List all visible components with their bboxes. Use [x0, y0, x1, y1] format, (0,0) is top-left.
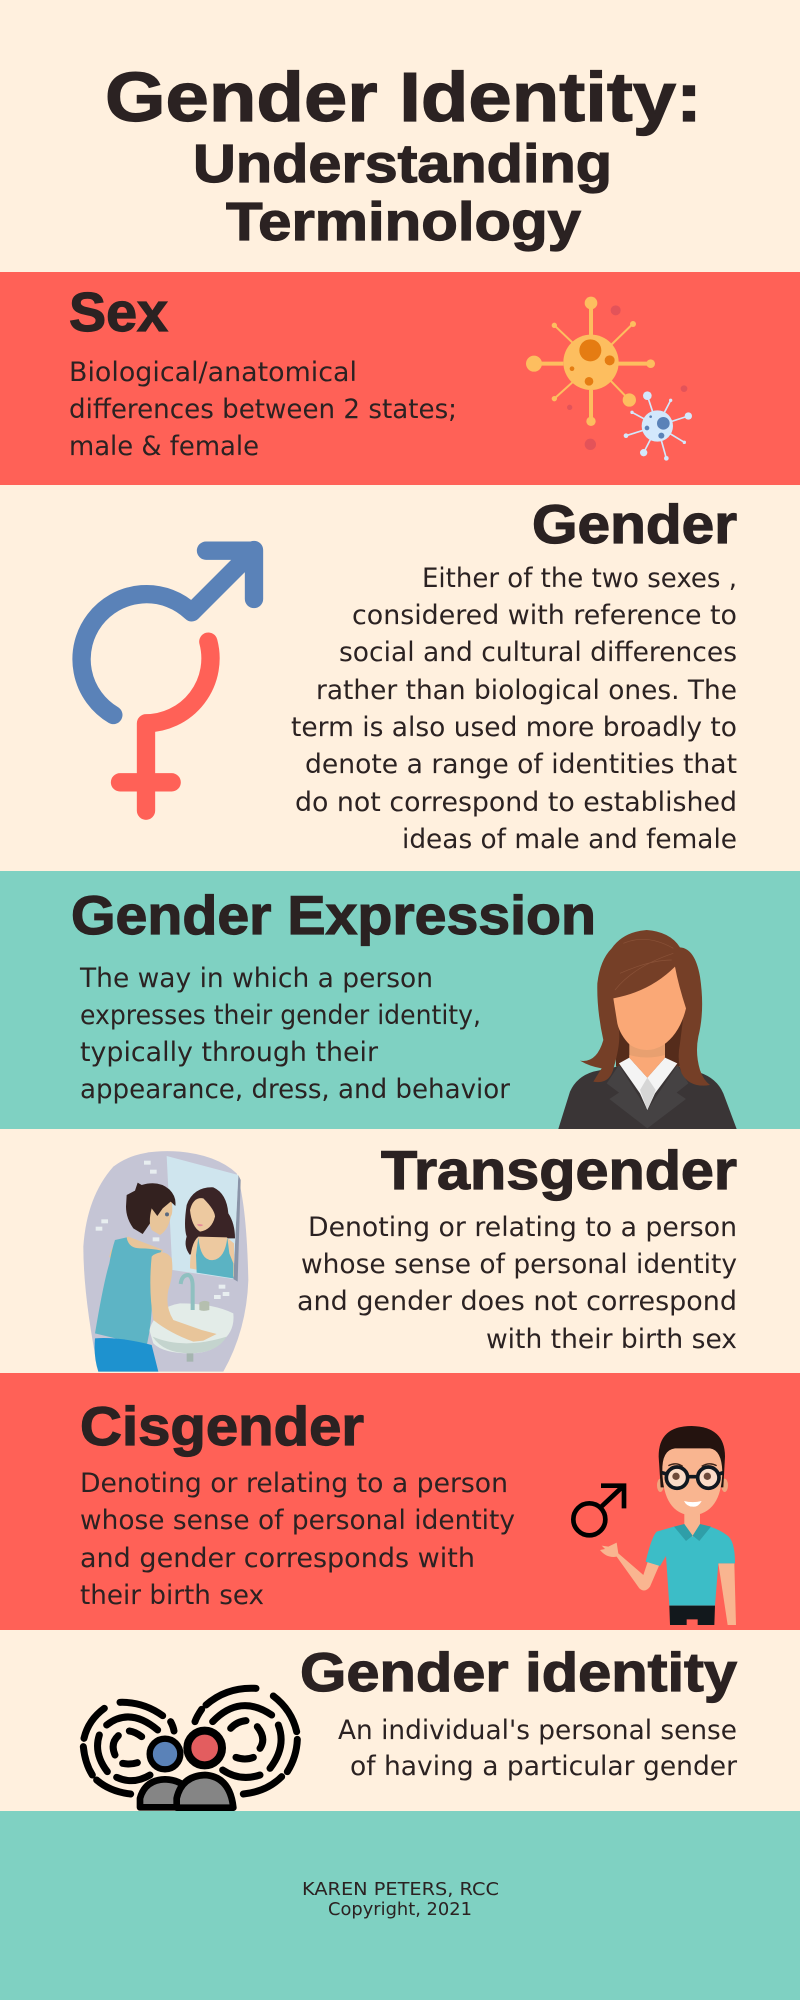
text: gender expression definition	[79, 963, 511, 1105]
panel: sex	[0, 272, 800, 485]
text: cisgender definition: whose sense of personal identity	[80, 1505, 515, 1536]
heading: transgender: Transgender	[381, 1139, 737, 1201]
heading: cisgender: Cisgender	[80, 1395, 364, 1457]
text: cisgender definition: their birth sex	[80, 1580, 264, 1611]
illustration: man with glasses	[600, 1426, 736, 1625]
title: Terminology	[226, 192, 581, 252]
text: gender definition: social and cultural differences	[339, 637, 737, 668]
text: gender expression definition: appearance, dress, and behavior	[80, 1074, 511, 1105]
text: author and copyright: Copyright, 2021	[328, 1899, 472, 1920]
text: gender expression definition: The way in which a person	[79, 963, 433, 994]
title	[105, 58, 702, 252]
text: sex definition	[69, 357, 457, 462]
panel: cisgender	[0, 1373, 800, 1630]
text: transgender definition: whose sense of personal identity	[301, 1249, 737, 1280]
text: gender expression definition: expresses their gender identity,	[80, 1000, 481, 1031]
text: gender definition: do not correspond to established	[295, 787, 737, 818]
text: transgender definition: Denoting or relating to a person	[308, 1212, 737, 1243]
band: gender expression background	[0, 871, 800, 1129]
band: footer background	[0, 1811, 800, 2000]
text: gender expression definition: typically through their	[80, 1037, 379, 1068]
heading: gender identity: Gender identity	[300, 1641, 737, 1703]
icon: male symbol	[573, 1486, 624, 1535]
text: gender definition: Either of the two sexes ,	[422, 563, 737, 594]
band: sex background	[0, 272, 800, 485]
text: author and copyright	[302, 1879, 499, 1920]
text: gender identity definition: of having a particular gender	[350, 1751, 738, 1782]
text: transgender definition	[297, 1212, 737, 1355]
text: gender definition: ideas of male and female	[402, 824, 737, 855]
panel: gender expression	[0, 871, 800, 1129]
text: transgender definition: and gender does not correspond	[297, 1286, 737, 1317]
icon: male and female symbols	[82, 550, 254, 811]
text: gender definition: rather than biological ones. The	[316, 675, 737, 706]
text: cisgender definition: and gender corresponds with	[80, 1543, 475, 1574]
text: author and copyright: KAREN PETERS, RCC	[302, 1879, 499, 1900]
heading: gender: Gender	[532, 493, 737, 555]
heading: gender expression: Gender Expression	[71, 884, 596, 946]
icon: cells	[526, 297, 692, 461]
text: cisgender definition	[80, 1468, 515, 1611]
panel: gender identity	[83, 1641, 738, 1808]
panel: transgender	[83, 1139, 737, 1372]
text: gender definition	[291, 563, 737, 855]
text: gender definition: denote a range of identities that	[305, 749, 737, 780]
band: cisgender background	[0, 1373, 800, 1630]
panel: footer	[0, 1811, 800, 2000]
text: cisgender definition: Denoting or relating to a person	[80, 1468, 508, 1499]
text: gender identity definition: An individual's personal sense	[338, 1715, 737, 1746]
text: gender definition: term is also used more broadly to	[291, 712, 737, 743]
icon: two people with thought rings	[83, 1688, 297, 1808]
title: Gender Identity:	[105, 58, 702, 136]
text: sex definition: differences between 2 states;	[69, 394, 457, 425]
panel: gender	[82, 493, 737, 855]
title: Understanding	[193, 134, 612, 194]
text: sex definition: Biological/anatomical	[69, 357, 357, 388]
text: gender definition: considered with reference to	[352, 600, 737, 631]
heading: sex: Sex	[69, 281, 168, 343]
illustration: person at mirror	[83, 1151, 248, 1372]
icon: woman portrait	[558, 930, 737, 1129]
text: transgender definition: with their birth sex	[486, 1324, 737, 1355]
text: sex definition: male & female	[69, 431, 259, 462]
text: gender identity definition	[338, 1715, 738, 1782]
